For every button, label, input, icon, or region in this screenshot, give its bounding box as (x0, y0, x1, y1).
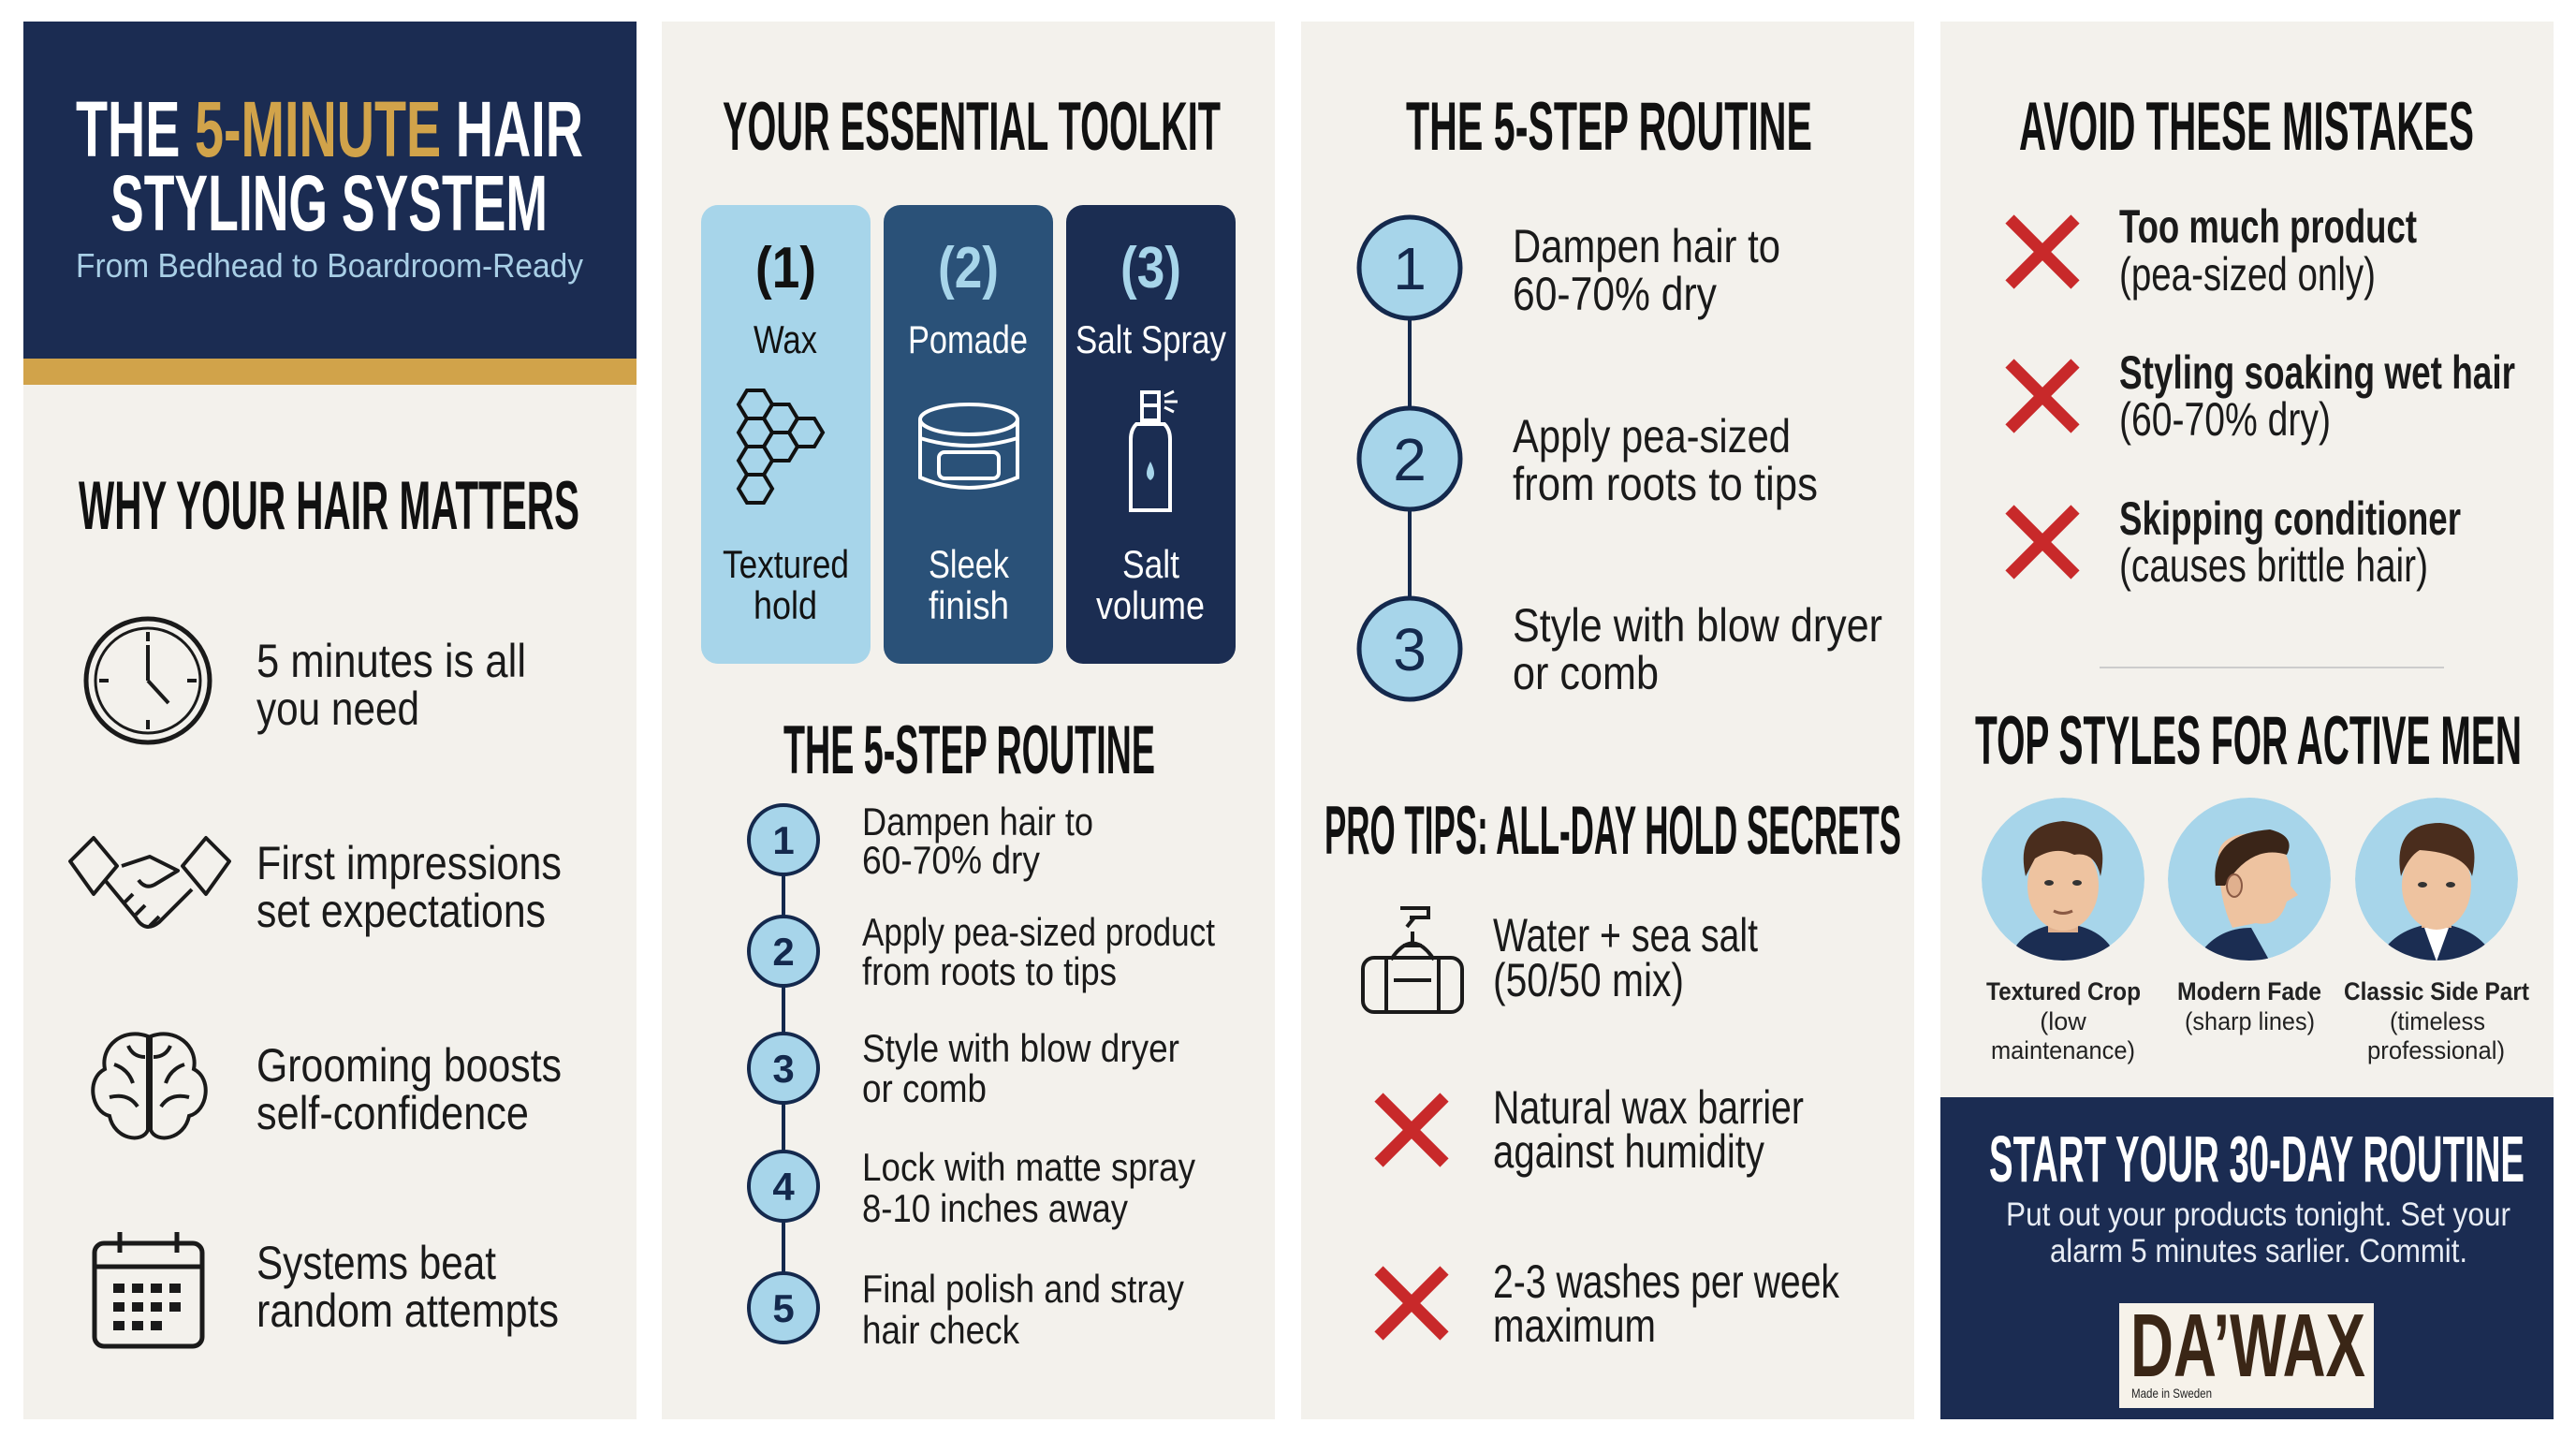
step 3: or comb (862, 1066, 987, 1110)
mistake 2 (2010, 346, 2515, 446)
text: 5 minutes: you need (256, 682, 419, 735)
step 4: 4 (772, 1165, 795, 1209)
label: textured crop: (low (2040, 1007, 2086, 1035)
text: PRO TIPS: ALL-DAY HOLD SECRETS (1325, 793, 1901, 869)
card: wax: (1) (755, 236, 816, 301)
step 5 (749, 1267, 1184, 1352)
card: salt spray: (3) (1120, 236, 1181, 301)
label: modern fade: Modern Fade (2177, 977, 2321, 1005)
title: THE 5-MINUTE HAIR (76, 85, 583, 173)
CTA text (2006, 1196, 2510, 1269)
big step 3: 3 (1393, 616, 1427, 683)
step 3: Style with blow dryer (862, 1026, 1179, 1070)
step 5: Final polish and stray (862, 1267, 1184, 1311)
step 5: hair check (862, 1308, 1020, 1352)
avatar: textured crop (1982, 798, 2144, 961)
icon: red x (1379, 1270, 1444, 1336)
gold band (23, 359, 637, 385)
label: classic side part: professional) (2367, 1036, 2505, 1064)
big step 2: Apply pea-sized (1513, 410, 1791, 462)
label: classic side part: Classic Side Part (2344, 977, 2529, 1005)
connector line (1408, 268, 1412, 649)
text: grooming: self-confidence (256, 1087, 529, 1139)
step 1 (749, 800, 1093, 882)
icon: clock (86, 619, 210, 742)
big step 3 (1359, 598, 1882, 699)
heading: toolkit: YOUR ESSENTIAL TOOLKIT (723, 89, 1221, 165)
connector line (782, 840, 785, 1308)
card: salt spray: volume (1096, 583, 1205, 627)
text: grooming (256, 1039, 562, 1139)
text: 5 minutes: 5 minutes is all (256, 635, 526, 687)
heading: 5-step routine: THE 5-STEP ROUTINE (783, 712, 1155, 788)
text: wax barrier (1493, 1081, 1804, 1178)
text: grooming: Grooming boosts (256, 1039, 562, 1092)
header block (23, 22, 637, 359)
panel: title and why hair matters (23, 22, 637, 1419)
CTA box (1940, 1097, 2554, 1419)
icon: calendar (95, 1232, 202, 1346)
label: modern fade (2177, 977, 2321, 1035)
big step 3: or comb (1513, 647, 1659, 699)
card: wax (701, 205, 871, 664)
mistake 3: Skipping conditioner (2119, 492, 2461, 545)
text: systems (256, 1237, 559, 1337)
label: textured crop (1986, 977, 2141, 1064)
card: pomade: finish (929, 583, 1009, 627)
mistake 2: (60-70% dry) (2119, 393, 2331, 446)
big step 3: Style with blow dryer (1513, 599, 1882, 652)
text: first impressions: set expectations (256, 885, 546, 937)
label: modern fade: (sharp lines) (2185, 1007, 2315, 1035)
CTA text: alarm 5 minutes sarlier. Commit. (2050, 1233, 2467, 1269)
label: classic side part: (timeless (2390, 1007, 2485, 1035)
big step 2 (1359, 408, 1818, 510)
text: water sea salt: Water + sea salt (1493, 909, 1758, 961)
mistake 1: Too much product (2119, 200, 2417, 253)
icon: handshake (70, 838, 229, 927)
text: water sea salt: (50/50 mix) (1493, 954, 1684, 1006)
card: salt spray (1066, 205, 1236, 664)
divider (2100, 667, 2444, 668)
step 2: Apply pea-sized product (862, 910, 1215, 954)
icon: honeycomb (739, 390, 823, 503)
mistake 3: (causes brittle hair) (2119, 539, 2428, 592)
title: STYLING SYSTEM (110, 159, 548, 247)
big step 1: 1 (1393, 235, 1427, 302)
logo: DA'WAX: DA’WAX (2130, 1296, 2365, 1396)
text: wax barrier: Natural wax barrier (1493, 1081, 1804, 1134)
card: pomade (884, 205, 1053, 664)
subtitle: From Bedhead to Boardroom-Ready (76, 246, 583, 285)
step 2: 2 (772, 930, 795, 974)
icon: red x (1379, 1097, 1444, 1163)
avatar: classic side part (2355, 798, 2518, 961)
mistake 1 (2010, 200, 2417, 301)
mistake 1: (pea-sized only) (2119, 248, 2376, 301)
card: salt spray: Salt (1122, 542, 1179, 586)
card: wax: Textured (723, 542, 849, 586)
big step 1: Dampen hair to (1513, 220, 1780, 272)
step 2 (749, 910, 1215, 993)
label: textured crop: maintenance) (1991, 1036, 2135, 1064)
text: first impressions: First impressions (256, 837, 562, 889)
label: classic side part (2344, 977, 2529, 1064)
icon: spray bag (1363, 908, 1462, 1012)
card: pomade: Sleek (929, 542, 1010, 586)
text: first impressions (256, 837, 562, 937)
panel: 5-step routine and pro tips (1301, 22, 1914, 1419)
label: textured crop: Textured Crop (1986, 977, 2141, 1005)
title (76, 85, 583, 247)
step 4: 8-10 inches away (862, 1186, 1128, 1230)
step 4 (749, 1145, 1195, 1230)
big step 2: from roots to tips (1513, 458, 1818, 510)
step 4: Lock with matte spray (862, 1145, 1195, 1189)
step 1: 1 (772, 818, 795, 862)
step 1: Dampen hair to (862, 800, 1093, 844)
text: washes: maximum (1493, 1299, 1656, 1352)
text: water sea salt (1493, 909, 1758, 1006)
text: washes: 2-3 washes per week (1493, 1255, 1840, 1308)
card: wax: Wax (754, 317, 817, 361)
card: salt spray: Salt Spray (1076, 317, 1226, 361)
mistake 3 (2010, 492, 2461, 592)
CTA text: Put out your products tonight. Set your (2006, 1196, 2510, 1233)
step 2: from roots to tips (862, 949, 1117, 993)
big step 1: 60-70% dry (1513, 268, 1717, 320)
big step 2: 2 (1393, 426, 1427, 493)
logo: DA'WAX: Made in Sweden (2131, 1386, 2212, 1401)
avatar: modern fade (2168, 798, 2331, 961)
step 5: 5 (772, 1286, 795, 1330)
step 1: 60-70% dry (862, 838, 1040, 882)
heading: why your hair matters: WHY YOUR HAIR MATTERS (79, 468, 579, 544)
text: systems: Systems beat (256, 1237, 496, 1289)
step 3 (749, 1026, 1179, 1110)
text: 5 minutes (256, 635, 526, 735)
heading: 5-step routine: THE 5-STEP ROUTINE (1406, 89, 1812, 165)
text: systems: random attempts (256, 1284, 559, 1337)
step 3: 3 (772, 1047, 795, 1091)
card: pomade: Pomade (908, 317, 1028, 361)
card: pomade: (2) (938, 236, 999, 301)
logo: DA'WAX (2119, 1296, 2374, 1408)
icon: brain (93, 1034, 206, 1137)
card: wax: hold (754, 583, 817, 627)
big step 1 (1359, 217, 1780, 320)
icon: spray bottle (1131, 391, 1178, 510)
icon: jar (920, 404, 1017, 488)
panel: mistakes, styles, CTA (1940, 22, 2554, 1419)
text: washes (1493, 1255, 1840, 1352)
panel: toolkit and 5-step routine (662, 22, 1275, 1419)
text: wax barrier: against humidity (1493, 1125, 1764, 1178)
